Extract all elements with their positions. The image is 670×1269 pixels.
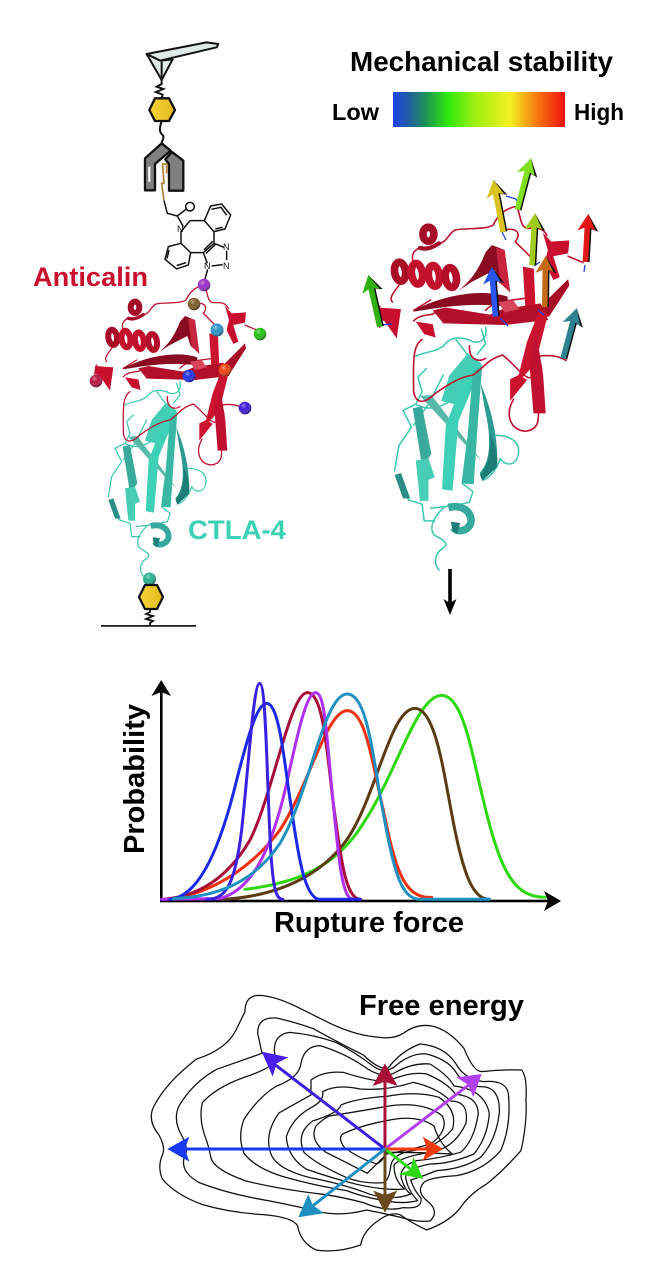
surface line	[101, 625, 196, 627]
legend label: Low: Low	[332, 99, 379, 125]
curve: red-orange	[170, 711, 432, 899]
arrow: red-orange	[385, 1137, 443, 1161]
surface anchor with hexagon and spring	[101, 572, 196, 627]
black pull arrow	[444, 569, 456, 615]
arrow: yellow	[483, 178, 514, 234]
arrow: blue	[482, 266, 507, 317]
curve: blue	[170, 703, 360, 899]
icon: spring linker	[156, 80, 163, 98]
curve: brown	[222, 708, 489, 899]
y axis label: Probability	[119, 704, 151, 854]
AFM cantilever and linker assembly	[145, 42, 231, 282]
arrow: blue	[167, 1137, 385, 1162]
text: triazole nitrogen labels: N	[223, 261, 230, 271]
arrow: red	[576, 213, 599, 263]
spheres: pulling positions	[90, 279, 266, 414]
arrow: orange	[535, 256, 557, 307]
icon: gray antibody	[145, 143, 183, 191]
y axis	[152, 680, 171, 902]
icon: peptide tag	[162, 164, 167, 201]
curve: green	[245, 695, 545, 897]
arrow: violet	[262, 1052, 385, 1149]
text: triazole nitrogen labels	[177, 224, 230, 271]
chart: rupture force probability distributions	[119, 680, 561, 939]
label: CTLA-4: CTLA-4	[188, 515, 286, 545]
protein structure: right, with force arrows	[359, 156, 599, 615]
text: triazole nitrogen labels: N	[204, 261, 210, 271]
x axis label: Rupture force	[274, 907, 464, 939]
x axis	[160, 891, 561, 911]
arrow: brown	[373, 1149, 397, 1213]
ribbon model: Anticalin and CTLA-4	[95, 285, 257, 576]
arrow: crimson	[373, 1063, 398, 1149]
text: triazole nitrogen labels: N	[223, 242, 230, 252]
arrow: green	[385, 1149, 423, 1179]
arrow: green	[359, 273, 391, 329]
icon: yellow hexagon domain	[149, 98, 175, 121]
title: Mechanical stability: Mechanical stability	[350, 46, 613, 77]
label: Anticalin: Anticalin	[33, 262, 148, 292]
legend label: High: High	[574, 99, 624, 125]
curve: purple	[162, 693, 353, 899]
distribution curves	[162, 683, 545, 899]
curve: violet	[207, 683, 283, 899]
icon: DBCO click-chemistry linker	[164, 201, 231, 282]
curve: crimson	[163, 693, 361, 899]
pulling connector segments	[380, 196, 585, 326]
icon: AFM cantilever tip	[147, 42, 218, 80]
icon: yellow hexagon domain	[139, 585, 163, 609]
legend gradient bar	[393, 92, 565, 127]
icon: spring	[146, 609, 153, 626]
arrow: purple	[385, 1074, 482, 1149]
contour lines	[151, 995, 526, 1251]
arrow: teal	[554, 306, 587, 361]
arrow: olive green	[522, 213, 546, 266]
text: triazole nitrogen labels: N	[177, 224, 184, 234]
contour plot: free energy landscape	[151, 995, 526, 1251]
teal sphere anchor	[143, 572, 156, 586]
protein structure: left, with spheres	[90, 279, 266, 576]
arrow: teal-blue	[298, 1149, 385, 1217]
ribbon model: Anticalin and CTLA-4	[377, 206, 583, 570]
arrow: lime	[508, 156, 542, 212]
curve: teal-blue	[173, 694, 489, 899]
heading: Free energy: Free energy	[359, 990, 524, 1022]
icon: linker to antibody	[160, 121, 163, 143]
legend: color scale	[332, 92, 624, 127]
